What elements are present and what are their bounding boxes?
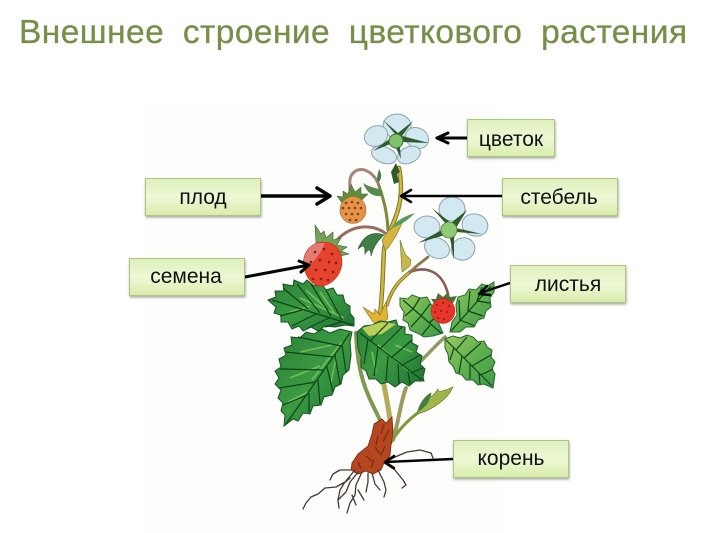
lower right leaf bbox=[445, 335, 495, 388]
upper left leaf bbox=[268, 280, 354, 331]
label: листья: листья bbox=[535, 273, 601, 296]
arrow: листья bbox=[479, 283, 510, 295]
arrow: цветок bbox=[437, 133, 467, 143]
illustration: strawberry plant bbox=[268, 114, 495, 513]
stipules and small leaves bbox=[382, 219, 404, 250]
arrow: стебель bbox=[401, 190, 502, 202]
lower left leaf bbox=[275, 329, 352, 426]
left part of small right leaf pair bbox=[400, 295, 443, 337]
large red fruit bbox=[303, 225, 349, 286]
arrow: плод bbox=[260, 188, 330, 204]
label: цветок: цветок bbox=[479, 128, 544, 151]
stems bbox=[337, 168, 448, 444]
title: Внешнее строение цветкового растения bbox=[19, 14, 687, 51]
label: плод bbox=[146, 178, 260, 216]
arrow: корень bbox=[385, 456, 453, 468]
label: корень bbox=[454, 440, 568, 478]
arrow: семена bbox=[245, 261, 309, 277]
label: цветок bbox=[468, 120, 554, 156]
roots bbox=[303, 450, 433, 513]
background of plant picture bbox=[144, 110, 500, 533]
label: семена bbox=[130, 258, 244, 296]
label: плод: плод bbox=[179, 186, 227, 209]
lower flower bbox=[414, 197, 490, 264]
rhizome bbox=[351, 417, 393, 474]
small orange fruit bbox=[337, 184, 368, 224]
label: стебель bbox=[502, 178, 618, 216]
small red fruit bbox=[431, 292, 457, 324]
top flower bbox=[361, 114, 432, 184]
right part of small right leaf pair bbox=[450, 282, 494, 332]
label: листья bbox=[510, 266, 626, 302]
right centre leaf bbox=[357, 320, 425, 387]
label: семена: семена bbox=[150, 265, 222, 288]
label: стебель: стебель bbox=[520, 186, 598, 209]
label: корень: корень bbox=[478, 447, 545, 470]
